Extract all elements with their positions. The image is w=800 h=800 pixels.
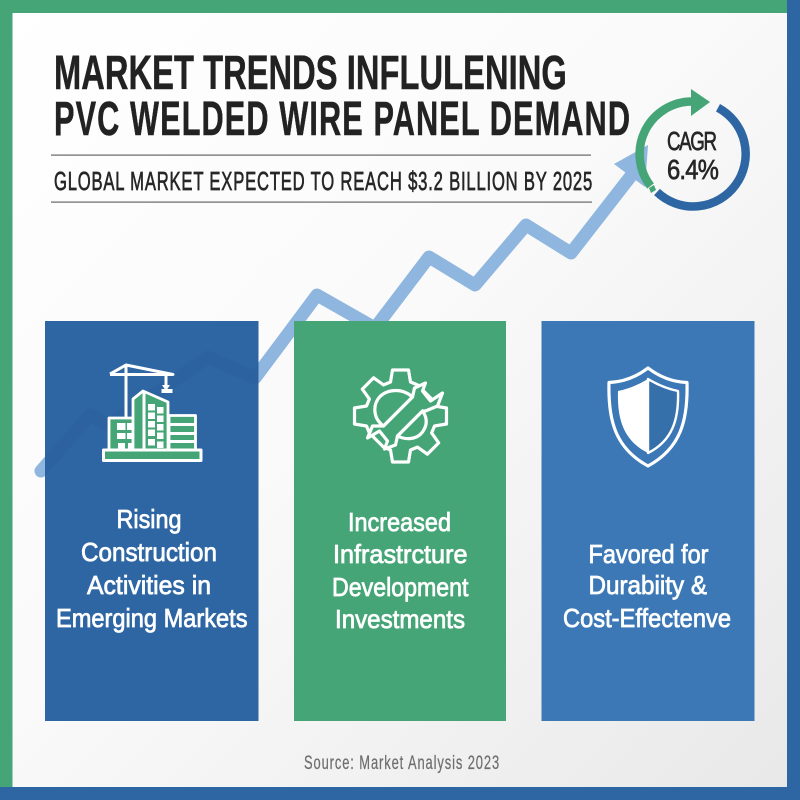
title: MARKET TRENDS INFLULENING [54, 46, 567, 100]
label: durability: Durabiity & [588, 570, 707, 600]
icon: crane and buildings [104, 365, 201, 460]
subtitle with rules: GLOBAL MARKET EXPECTED TO REACH $3.2 BILLION BY 2025 [54, 166, 592, 196]
source note: Source: Market Analysis 2023 [304, 753, 499, 774]
title: PVC WELDED WIRE PANEL DEMAND [54, 92, 630, 146]
label: rising construction: Rising [116, 504, 182, 534]
label: durability: Cost-Effectenve [563, 603, 731, 633]
icon: shield [609, 368, 687, 466]
label: infrastructure: Increased [348, 507, 451, 537]
label: infrastructure [332, 507, 469, 634]
label: rising construction: Emerging Markets [56, 603, 248, 633]
label: durability: Favored for [588, 539, 709, 569]
panel: durability [542, 321, 754, 721]
panel: construction [45, 321, 258, 721]
label: infrastructure: Development [332, 572, 469, 602]
growth trend arrow [41, 145, 648, 471]
ring: blue arc [657, 108, 746, 206]
label: durability [563, 539, 731, 633]
icon: gear and wrench [354, 370, 446, 462]
label: infrastructure: Investments [335, 604, 465, 634]
label: rising construction [56, 504, 248, 633]
CAGR value: 6.4% [667, 153, 719, 185]
CAGR value: CAGR [667, 126, 717, 156]
label: rising construction: Activities in [87, 570, 211, 600]
label: rising construction: Construction [81, 537, 217, 567]
panel: infrastructure [294, 321, 506, 721]
CAGR badge [640, 89, 746, 206]
CAGR value [667, 126, 719, 185]
title [54, 46, 630, 146]
ring: green arrow [640, 89, 710, 193]
label: infrastructure: Infrastrcture [333, 539, 468, 569]
